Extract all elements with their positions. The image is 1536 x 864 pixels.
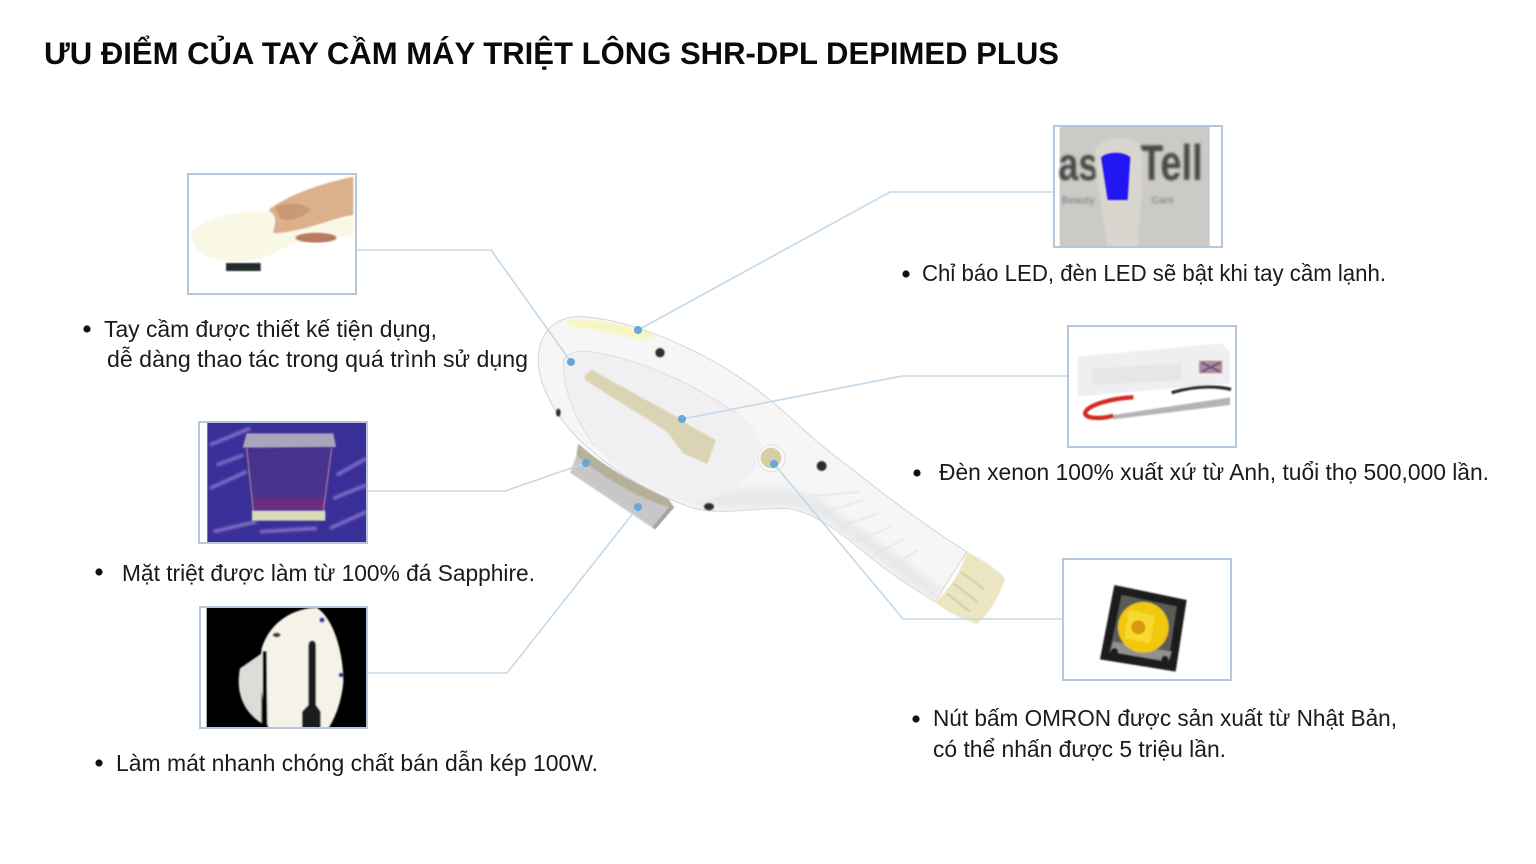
body shading [696, 488, 942, 596]
text: OMRON [912, 705, 1397, 762]
photo: OMRON button [1063, 559, 1231, 680]
photo: xenon lamp [1068, 326, 1236, 447]
handpiece body [538, 317, 967, 602]
photo: sapphire crystal [199, 422, 367, 543]
leader lines and dots [357, 192, 1068, 673]
text: ergonomic handle: dễ dàng thao tác trong quá trình sử dụng [107, 346, 528, 372]
photo: LED indicator: Beauty [1062, 195, 1095, 206]
photo: LED indicator [1054, 126, 1222, 247]
inner panel [563, 351, 760, 501]
text: OMRON: có thể nhấn được 5 triệu lần. [933, 736, 1226, 762]
end cap [935, 552, 1005, 624]
power button [758, 445, 785, 472]
screws [556, 348, 827, 510]
text: xenon: Đèn xenon 100% xuất xứ từ Anh, tuổi thọ 500,000 lần. [939, 459, 1489, 485]
text: cooling: Làm mát nhanh chóng chất bán dẫn kép 100W. [116, 750, 598, 776]
yellow LED strip [567, 320, 655, 339]
text: sapphire: Mặt triệt được làm từ 100% đá Sapphire. [122, 560, 535, 586]
product: SHR handpiece [538, 317, 1005, 624]
handle grip ridges [808, 492, 918, 567]
photo: cooling handpiece [200, 607, 367, 728]
photo: LED indicator: Care [1152, 195, 1174, 206]
text: ergonomic handle [83, 316, 528, 372]
photo: hand holding handpiece [188, 174, 356, 294]
title: ƯU ĐIỂM CỦA TAY CẦM MÁY TRIỆT LÔNG SHR-DPL DEPIMED PLUS [44, 35, 1059, 71]
text: ergonomic handle: Tay cầm được thiết kế tiện dụng, [104, 316, 437, 342]
tan lamp window [585, 370, 716, 464]
text: LED: Chỉ báo LED, đèn LED sẽ bật khi tay cầm lạnh. [922, 260, 1386, 286]
photo: LED indicator: Tell [1140, 135, 1203, 191]
photo: LED indicator: as [1058, 138, 1098, 190]
text: OMRON: Nút bấm OMRON được sản xuất từ Nhật Bản, [933, 705, 1397, 731]
handpiece head block [570, 444, 674, 529]
